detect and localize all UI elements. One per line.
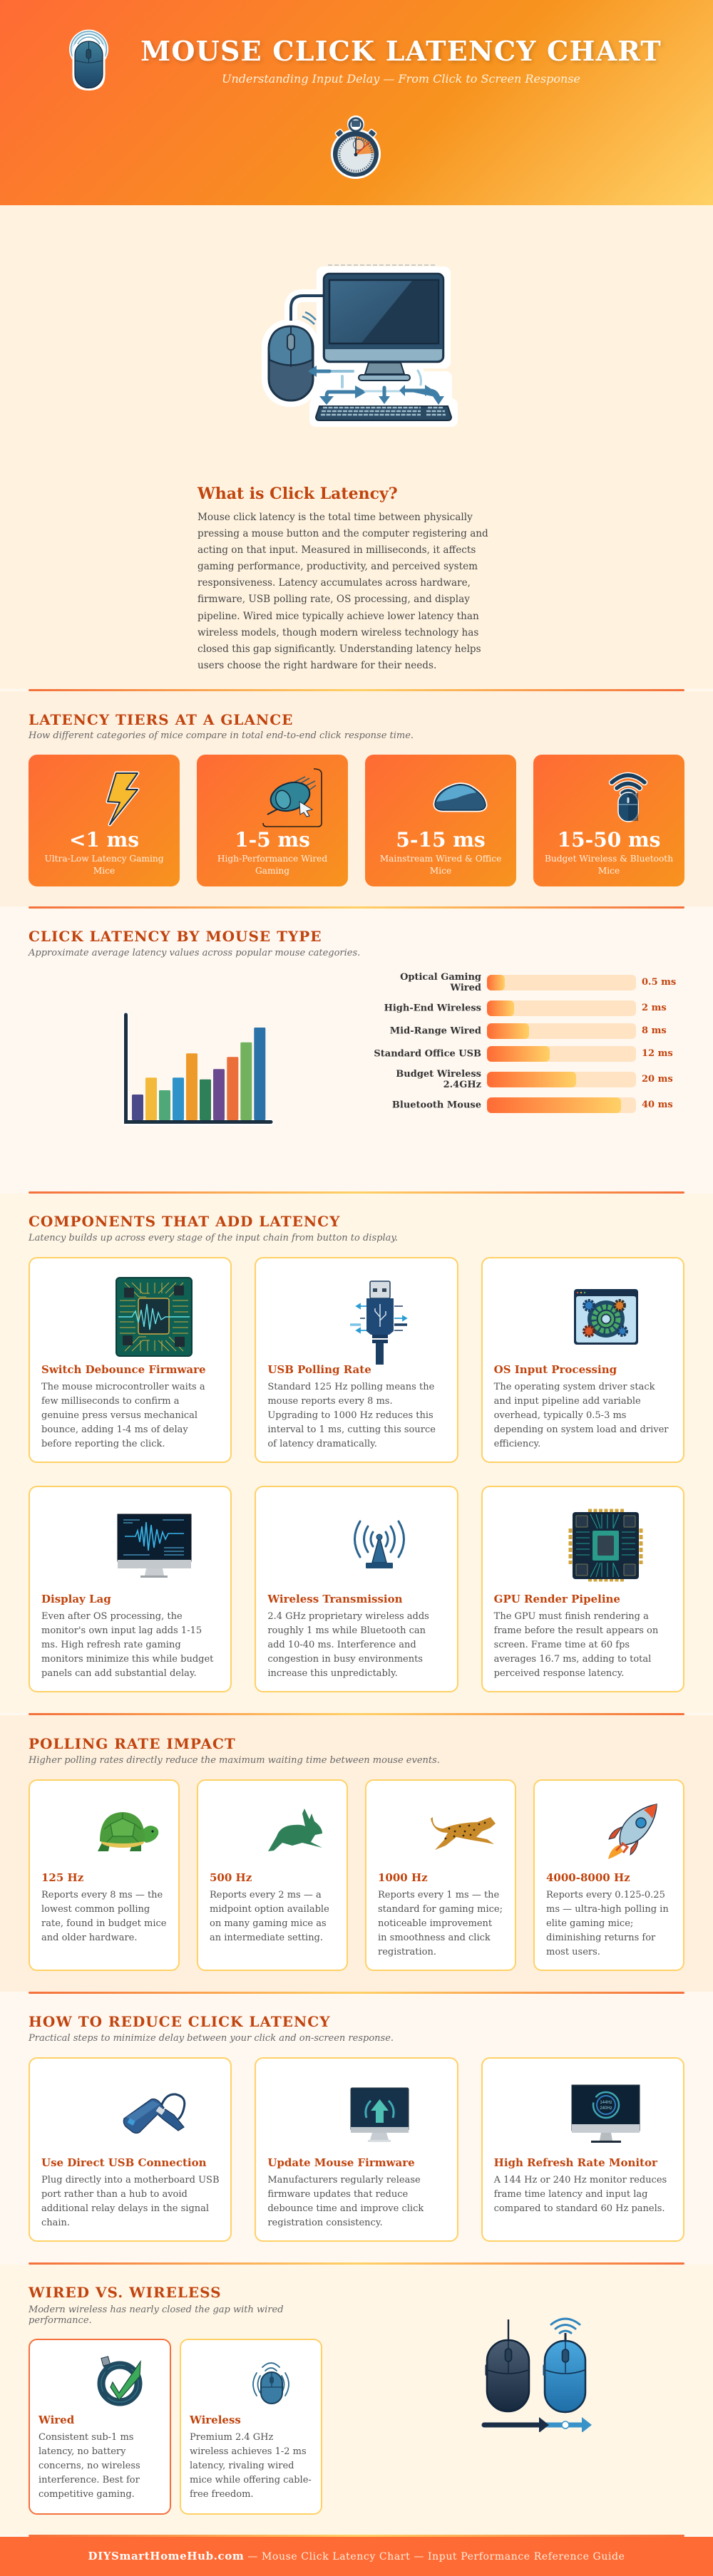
section: latency tiers — [0, 691, 713, 906]
card text — [267, 1593, 429, 1679]
icon: wireless mouse with signal arcs — [250, 2358, 292, 2406]
card: os input processing — [481, 1257, 684, 1463]
icon: gears in a window — [574, 1289, 638, 1345]
intro paragraph: responsiveness. Latency accumulates across hardware, — [198, 577, 471, 589]
hero illustration: mouse, monitor and keyboard — [262, 264, 458, 427]
card text: screen. Frame time at 60 fps — [494, 1640, 630, 1650]
card text: rate, found in budget mice — [41, 1918, 167, 1929]
heading: CLICK LATENCY BY MOUSE TYPE — [29, 928, 322, 945]
card text: The operating system driver stack — [494, 1382, 655, 1392]
bar: mid-range wired: 8 ms — [642, 1025, 667, 1036]
card text: bounce, adding 1-4 ms of delay — [41, 1424, 188, 1435]
card text: overhead, typically 0.5-3 ms — [494, 1410, 626, 1421]
intro paragraph: pressing a mouse button and the computer registering and — [198, 528, 488, 539]
card text: standard for gaming mice; — [378, 1904, 503, 1915]
tier description — [44, 854, 164, 875]
bar: high-end wireless: High-End Wireless — [384, 1003, 481, 1013]
card text — [267, 2156, 424, 2230]
card text — [41, 1593, 214, 1679]
card text: noticeable improvement — [378, 1918, 492, 1929]
subtitle: Understanding Input Delay — From Click to Screen Response — [222, 72, 580, 86]
icon: antenna with signal arcs — [354, 1520, 405, 1568]
card text: OS Input Processing — [494, 1363, 617, 1376]
section subtitle — [29, 2305, 284, 2326]
tier description: Ultra-Low Latency Gaming — [44, 854, 164, 864]
section: click latency by mouse type — [0, 909, 713, 1191]
card text: of latency dramatically. — [267, 1439, 377, 1449]
heading: what is click latency: What is Click Latency? — [198, 485, 398, 503]
heading: WIRED VS. WIRELESS — [29, 2284, 222, 2301]
card text: compared to standard 60 Hz panels. — [494, 2203, 665, 2214]
intro paragraph: Mouse click latency is the total time between physically — [198, 512, 473, 523]
card text: lowest common polling — [41, 1904, 150, 1915]
tier description: Budget Wireless & Bluetooth — [545, 854, 673, 864]
tier description: Gaming — [255, 865, 289, 875]
card text: interference. Best for — [39, 2475, 140, 2486]
card text: Wireless Transmission — [267, 1593, 403, 1605]
card text: monitors minimize this while budget — [41, 1654, 213, 1665]
card text: Upgrading to 1000 Hz reduces this — [267, 1410, 434, 1421]
card text: Update Mouse Firmware — [267, 2156, 415, 2169]
bar: optical gaming wired: Wired — [450, 983, 481, 993]
section: how to reduce click latency — [0, 1994, 713, 2262]
intro paragraph: gaming performance, productivity, and perceived system — [198, 561, 478, 572]
tier description — [217, 854, 327, 875]
bar: high-end wireless — [384, 1000, 667, 1016]
card text: 2.4 GHz proprietary wireless adds — [267, 1611, 429, 1622]
card text: chain. — [41, 2218, 70, 2228]
tier description: High-Performance Wired — [217, 854, 327, 864]
card text: USB Polling Rate — [267, 1363, 371, 1376]
card text — [41, 1363, 206, 1449]
section: polling rate impact — [0, 1715, 713, 1992]
card text: on many gaming mice as — [210, 1918, 327, 1929]
bar: budget wireless: Budget Wireless — [396, 1069, 481, 1080]
intro paragraph: pipeline. Wired mice typically achieve lower latency than — [198, 611, 479, 622]
bar: optical gaming wired — [400, 972, 676, 993]
icon: cheetah — [431, 1817, 496, 1850]
heading: POLLING RATE IMPACT — [29, 1735, 236, 1752]
bar: standard office usb: Standard Office USB — [374, 1049, 481, 1059]
card text — [41, 1871, 167, 1943]
card text: diminishing returns for — [546, 1933, 655, 1943]
icon: gpu chip — [569, 1509, 643, 1582]
card text — [546, 1871, 669, 1957]
bar: high-end wireless: 2 ms — [642, 1003, 667, 1013]
header banner — [0, 0, 713, 205]
icon: high refresh monitor: 240Hz — [600, 2106, 612, 2111]
bar: budget wireless — [396, 1069, 673, 1090]
icon: monitor with update arrow — [349, 2086, 411, 2146]
card: update mouse firmware — [255, 2057, 458, 2242]
section subtitle: performance. — [29, 2314, 92, 2326]
card: display lag — [29, 1486, 232, 1692]
card text: efficiency. — [494, 1439, 540, 1449]
card text: frame time latency and input lag — [494, 2189, 647, 2200]
tier card: under 1 ms — [29, 755, 180, 886]
tier value: <1 ms — [69, 828, 139, 852]
footer — [0, 2537, 713, 2576]
section subtitle: Higher polling rates directly reduce the maximum waiting time between mouse events. — [29, 1755, 440, 1766]
section subtitle: How different categories of mice compare in total end-to-end click response time. — [29, 730, 414, 741]
intro paragraph: users choose the right hardware for their needs. — [198, 660, 436, 671]
heading: HOW TO REDUCE CLICK LATENCY — [29, 2013, 330, 2030]
icon: mouse with signal rings — [69, 30, 108, 90]
section: wired vs wireless — [0, 2265, 713, 2535]
card text: add 10-40 ms. Interference and — [267, 1640, 416, 1650]
card text — [190, 2413, 312, 2502]
card text: monitor's own input lag adds 1-15 — [41, 1625, 202, 1636]
bar: optical gaming wired: Optical Gaming — [400, 972, 481, 983]
tier description: Mainstream Wired & Office — [380, 854, 501, 864]
card text: Switch Debounce Firmware — [41, 1363, 206, 1376]
card text: free freedom. — [190, 2489, 254, 2500]
card text: frame before the result appears on — [494, 1625, 658, 1636]
icon: cable coil with check mark — [95, 2354, 145, 2408]
bar: optical gaming wired: 0.5 ms — [642, 977, 676, 988]
card text — [39, 2413, 140, 2502]
card text: firmware updates that reduce — [267, 2189, 408, 2200]
card text: before reporting the click. — [41, 1439, 165, 1449]
card text: GPU Render Pipeline — [494, 1593, 620, 1605]
bar: standard office usb: 12 ms — [642, 1048, 673, 1059]
tier description — [380, 854, 501, 875]
card text: roughly 1 ms while Bluetooth can — [267, 1625, 426, 1636]
card text: 500 Hz — [210, 1871, 252, 1884]
intro paragraph: acting on that input. Measured in milliseconds, it affects — [198, 544, 476, 556]
icon: turtle — [98, 1812, 158, 1851]
card text — [494, 2156, 667, 2216]
card: usb polling rate — [255, 1257, 458, 1463]
card: wireless — [180, 2339, 322, 2515]
card text: elite gaming mice; — [546, 1918, 633, 1929]
card: 125 Hz — [29, 1779, 180, 1971]
card text: and older hardware. — [41, 1933, 138, 1943]
card text: 1000 Hz — [378, 1871, 428, 1884]
bar: mid-range wired — [390, 1023, 667, 1039]
section subtitle: Modern wireless has nearly closed the gap with wired — [29, 2305, 284, 2314]
card text: additional relay delays in the signal — [41, 2203, 209, 2214]
card text — [493, 1593, 658, 1679]
bar: mid-range wired: Mid-Range Wired — [390, 1026, 481, 1036]
bar: standard office usb — [374, 1046, 673, 1062]
card: 1000 Hz — [365, 1779, 516, 1971]
icon: usb hub and cable — [123, 2094, 185, 2133]
icon: rabbit — [268, 1809, 322, 1851]
icon: fast gaming mouse with cursor — [262, 768, 322, 827]
card text — [267, 1363, 436, 1449]
card: 4000-8000 Hz — [533, 1779, 684, 1971]
icon: usb plug with data arrows — [350, 1281, 408, 1365]
bar: bluetooth mouse — [392, 1097, 673, 1113]
card: gpu render pipeline — [481, 1486, 684, 1692]
card text: Premium 2.4 GHz — [190, 2432, 273, 2443]
footer: DIYSmartHomeHub.com — Mouse Click Latency Chart — Input Performance Reference Guide — [88, 2550, 625, 2562]
card text: Use Direct USB Connection — [41, 2156, 207, 2169]
heading: COMPONENTS THAT ADD LATENCY — [29, 1213, 340, 1230]
card text: The mouse microcontroller waits a — [41, 1382, 205, 1392]
icon: lightning bolt — [106, 771, 140, 827]
card text: High Refresh Rate Monitor — [494, 2156, 657, 2169]
icon: monitor with waveform — [117, 1514, 191, 1578]
icon: wireless mouse — [609, 772, 647, 822]
card text: Display Lag — [41, 1593, 111, 1605]
card text — [378, 1871, 503, 1957]
card: switch debounce firmware — [29, 1257, 232, 1463]
section subtitle: Latency builds up across every stage of the input chain from button to display. — [29, 1233, 398, 1243]
tier description: Mice — [430, 865, 451, 875]
card text: Wired — [39, 2414, 74, 2426]
section subtitle: Practical steps to minimize delay between your click and on-screen response. — [29, 2033, 394, 2044]
card text: depending on system load and driver — [494, 1424, 668, 1435]
intro paragraph: firmware, USB polling rate, OS processing, and display — [198, 594, 470, 605]
card text: increase this unpredictably. — [267, 1668, 398, 1679]
card text: mouse reports every 8 ms. — [267, 1396, 393, 1407]
card text: 125 Hz — [41, 1871, 83, 1884]
tier card: 15-50 ms — [533, 755, 684, 886]
icon: rocket — [608, 1804, 657, 1859]
tier value: 1-5 ms — [235, 828, 310, 852]
card text: Standard 125 Hz polling means the — [267, 1382, 434, 1392]
section subtitle: Approximate average latency values across popular mouse categories. — [29, 948, 360, 958]
chart illustration: column bars — [123, 1012, 274, 1126]
card text: Plug directly into a motherboard USB — [41, 2175, 220, 2186]
card: wireless transmission — [255, 1486, 458, 1692]
card text: genuine press versus mechanical — [41, 1410, 198, 1421]
card text: 4000-8000 Hz — [546, 1871, 630, 1884]
tier description — [545, 854, 673, 875]
intro paragraph — [198, 512, 488, 671]
tier description: Mice — [598, 865, 620, 875]
card text: Consistent sub-1 ms — [39, 2432, 133, 2443]
card text: and input pipeline add variable — [494, 1396, 641, 1407]
tier value: 5-15 ms — [396, 828, 486, 852]
card text: Reports every 1 ms — the — [378, 1890, 499, 1900]
card text: debounce time and improve click — [267, 2203, 424, 2214]
icon: high refresh monitor — [570, 2083, 642, 2146]
card text — [210, 1871, 329, 1943]
card text: averages 16.7 ms, adding to total — [494, 1654, 651, 1665]
intro paragraph: wireless models, though modern wireless technology has — [198, 627, 478, 638]
intro paragraph: closed this gap significantly. Understanding latency helps — [198, 643, 481, 655]
icon: circuit board with waveform — [116, 1277, 193, 1357]
bar: bluetooth mouse: 40 ms — [642, 1100, 673, 1110]
card text: Wireless — [190, 2414, 241, 2426]
card text — [493, 1363, 669, 1449]
tier card: 5-15 ms — [365, 755, 516, 886]
card text: panels can add substantial delay. — [41, 1668, 197, 1679]
tier description: Mice — [93, 865, 115, 875]
card text: latency, rivaling wired — [190, 2461, 294, 2471]
bar: bluetooth mouse: Bluetooth Mouse — [392, 1100, 481, 1110]
illustration: wired and wireless mice with latency arrow — [478, 2314, 595, 2432]
card: high refresh rate monitor — [481, 2057, 684, 2242]
tier value: 15-50 ms — [558, 828, 660, 852]
card text: ms — ultra-high polling in — [546, 1904, 669, 1915]
bar: budget wireless: 2.4GHz — [443, 1080, 481, 1090]
bar: budget wireless: 20 ms — [642, 1074, 673, 1085]
icon: high refresh monitor: 144Hz — [600, 2101, 612, 2105]
card text: Manufacturers regularly release — [267, 2175, 421, 2186]
card text: wireless achieves 1-2 ms — [190, 2446, 307, 2457]
card text: The GPU must finish rendering a — [494, 1611, 649, 1622]
section: components that add latency — [0, 1194, 713, 1713]
card text — [41, 2156, 220, 2230]
card text: an intermediate setting. — [210, 1933, 323, 1943]
card text: registration. — [378, 1947, 436, 1957]
card: 500 Hz — [197, 1779, 348, 1971]
card text: interval to 1 ms, cutting this source — [267, 1424, 436, 1435]
card text: Reports every 2 ms — a — [210, 1890, 322, 1900]
card text: concerns, no wireless — [39, 2461, 140, 2471]
title: MOUSE CLICK LATENCY CHART — [140, 35, 662, 67]
card text: midpoint option available — [210, 1904, 329, 1915]
card text: A 144 Hz or 240 Hz monitor reduces — [494, 2175, 667, 2186]
card text: Reports every 8 ms — the — [41, 1890, 163, 1900]
card text: perceived response latency. — [494, 1668, 624, 1679]
card text: few milliseconds to confirm a — [41, 1396, 179, 1407]
card text: ms. High refresh rate gaming — [41, 1640, 181, 1650]
card: wired — [29, 2339, 171, 2515]
icon: office mouse — [434, 782, 488, 812]
section: what is click latency — [0, 205, 713, 689]
card text: mice while offering cable- — [190, 2475, 312, 2486]
card text: most users. — [546, 1947, 600, 1957]
card text: Even after OS processing, the — [41, 1611, 183, 1622]
card text: port rather than a hub to avoid — [41, 2189, 188, 2200]
card text: in smoothness and click — [378, 1933, 491, 1943]
card text: Reports every 0.125-0.25 — [546, 1890, 665, 1900]
card text: registration consistency. — [267, 2218, 383, 2228]
tier card: 1-5 ms — [197, 755, 348, 886]
card text: competitive gaming. — [39, 2489, 135, 2500]
card: use direct usb connection — [29, 2057, 232, 2242]
heading: LATENCY TIERS AT A GLANCE — [29, 711, 293, 728]
icon: stopwatch — [331, 115, 381, 179]
card text: latency, no battery — [39, 2446, 125, 2457]
card text: congestion in busy environments — [267, 1654, 423, 1665]
